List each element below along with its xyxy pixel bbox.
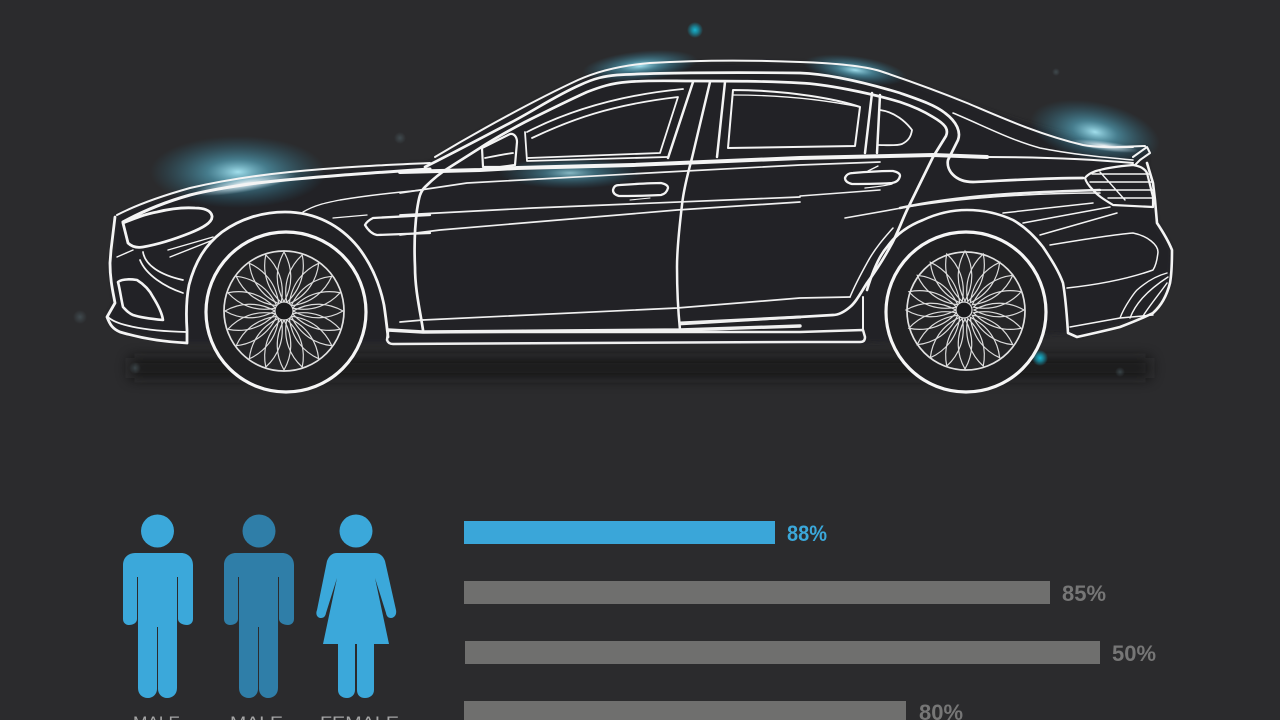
rear quarter, tail light and bumper — [850, 146, 1172, 337]
bar: highlighted 88% — [464, 521, 775, 544]
hood, bumper and headlight — [107, 163, 430, 343]
icon: male figure, bright blue — [123, 514, 193, 698]
value: 50%: 50% — [1112, 641, 1156, 666]
front wheel — [206, 232, 366, 392]
bar chart: percentages — [464, 521, 1156, 720]
illustration: car line drawing — [73, 22, 1172, 392]
rear wheel — [886, 232, 1046, 392]
bar: 85% — [464, 581, 1050, 604]
doors, windows and mirror — [482, 82, 912, 330]
ground shadow under car — [130, 358, 1150, 378]
character lines and sill — [387, 162, 1100, 344]
sparkle dots — [73, 22, 1125, 377]
roof and body outlines — [400, 61, 1133, 330]
car body shading — [107, 62, 1172, 343]
light glows — [150, 45, 1166, 208]
icon: female figure — [316, 514, 396, 698]
bar: 80% — [464, 701, 906, 720]
figure labels (cropped at the page edge) — [133, 713, 399, 720]
bar: 50% — [465, 641, 1100, 664]
value: 85%: 85% — [1062, 581, 1106, 606]
value: 88%: 88% — [787, 521, 827, 546]
icon: male figure, dark blue — [224, 514, 294, 698]
